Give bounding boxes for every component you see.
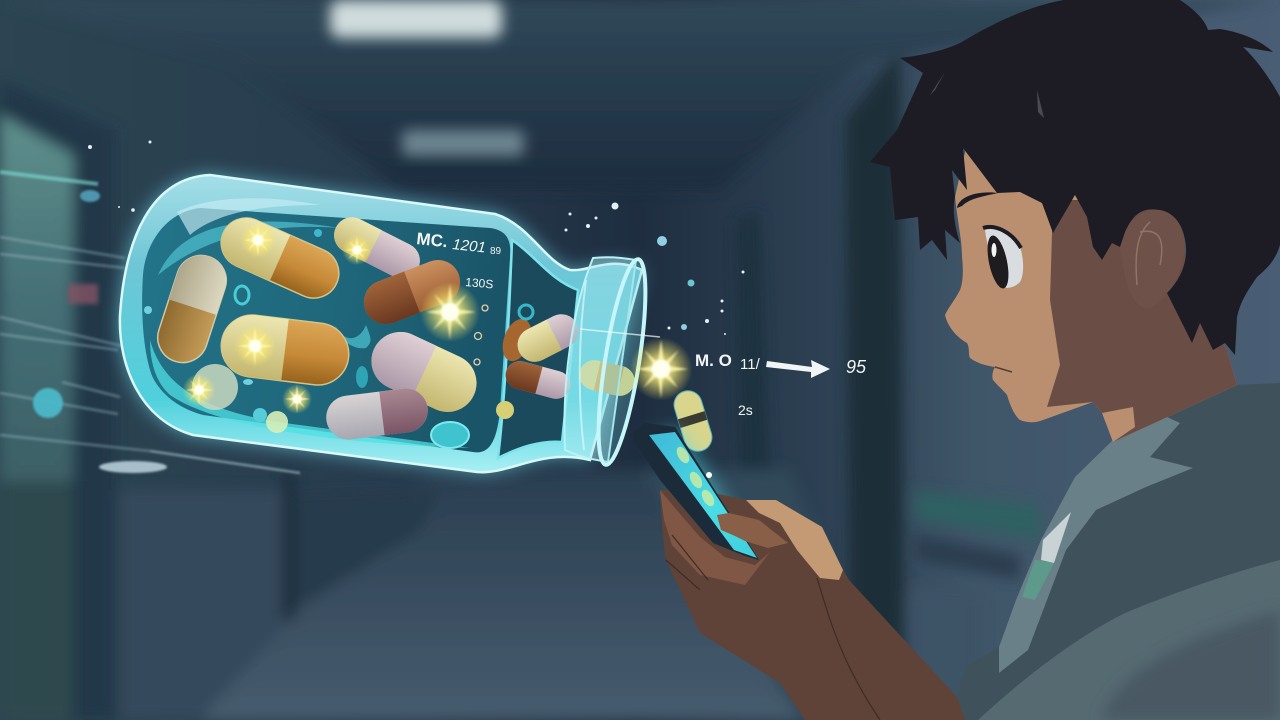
- hand: lit palm edge: [660, 490, 770, 585]
- capsule: brown: [357, 254, 467, 330]
- face and neck shadow: [1047, 200, 1237, 442]
- bottle label text: 1201: [452, 236, 487, 256]
- eyebrow: [957, 192, 998, 208]
- capsule: pink upper: [328, 211, 426, 285]
- hand: thumb: [717, 513, 788, 548]
- boy: [870, 0, 1280, 720]
- bottle label text: MC.: [416, 229, 449, 251]
- label dots: [474, 305, 488, 365]
- bottle label text: 130S: [465, 275, 494, 291]
- capsule: gold upper: [213, 210, 347, 306]
- capsule: large centre: [218, 311, 352, 389]
- falling capsule near phone: [671, 387, 715, 455]
- phone annotation text and arrow: 11/: [740, 356, 761, 373]
- bottle body: [120, 175, 642, 472]
- phone annotation text and arrow: [695, 351, 867, 418]
- collar: [999, 417, 1193, 673]
- neck and face: [945, 130, 1237, 442]
- swirls in liquid: [150, 198, 470, 448]
- large sparkle at bottle mouth: [630, 338, 692, 400]
- bottle liquid interior: [142, 208, 510, 452]
- jacket lower lit sleeve: [978, 560, 1280, 720]
- motion streaks and bokeh at left: [0, 172, 300, 473]
- bottle label text: [416, 229, 502, 291]
- capsule: pink and cream right: [362, 322, 486, 422]
- white undershirt: [1041, 512, 1071, 563]
- hair: [870, 0, 1280, 355]
- bubbles in liquid: [144, 229, 533, 448]
- hands holding phone: [633, 423, 970, 720]
- green undershirt: [1022, 560, 1054, 600]
- phone screen glow: [650, 430, 765, 560]
- bottle glow: [120, 175, 642, 472]
- bottle label text: 89: [490, 246, 502, 257]
- pill bottle: [120, 175, 660, 472]
- phone annotation text and arrow: 95: [846, 357, 867, 377]
- bottle neck interior: [498, 240, 578, 458]
- eye: [983, 227, 1023, 290]
- capsule: vertical left: [151, 249, 233, 369]
- arrow: [766, 360, 830, 378]
- sparkles in bottle: [182, 222, 480, 414]
- flying particles: [88, 140, 744, 335]
- hand: base and forearm: [660, 490, 970, 720]
- phone annotation text and arrow: M. O: [695, 351, 732, 370]
- hand: index finger lit: [746, 500, 843, 580]
- jacket body: [957, 383, 1280, 720]
- jacket shadow: [1100, 610, 1280, 720]
- phone annotation text and arrow: 2s: [738, 402, 753, 418]
- phone: [633, 423, 759, 560]
- capsule: in neck, brown: [503, 358, 573, 402]
- capsule: brown shard in neck: [497, 315, 537, 365]
- capsule: exiting neck: [576, 357, 638, 399]
- capsule: mauve lower: [324, 386, 430, 442]
- bottle neck ring: [564, 257, 660, 467]
- mouth: [995, 367, 1012, 372]
- capsule: in neck, cream and pink: [512, 308, 584, 368]
- ear: [1120, 210, 1185, 308]
